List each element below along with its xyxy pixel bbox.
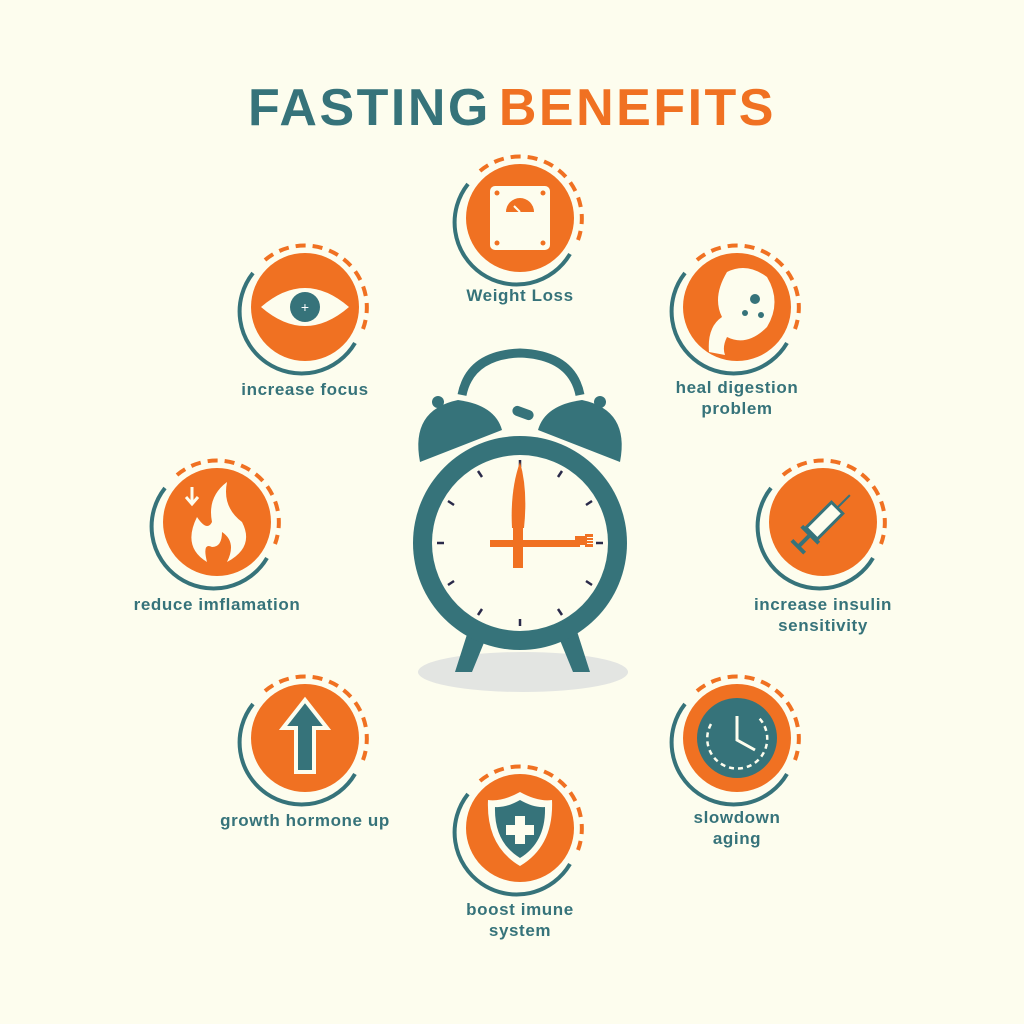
label: reduce inflammation: reduce imflamation (134, 595, 300, 614)
icon: flame (152, 460, 279, 588)
icon: weight loss scale (455, 156, 582, 284)
title: FASTINGBENEFITS (248, 79, 776, 137)
label: increase focus: increase focus (241, 380, 369, 399)
label: heal digestion: problem (701, 399, 773, 418)
label: insulin (754, 595, 892, 635)
icon: eye (240, 245, 367, 373)
label: heal digestion: heal digestion (676, 378, 798, 397)
label: slowdown aging: aging (713, 829, 761, 848)
icon: arrow up (240, 676, 367, 804)
alarm clock (413, 353, 628, 692)
label: heal digestion (676, 378, 798, 418)
label: growth hormone: growth hormone up (220, 811, 390, 830)
label: immune: system (489, 921, 551, 940)
label: insulin: sensitivity (778, 616, 868, 635)
label: slowdown aging: slowdown (694, 808, 780, 827)
icon: stomach (672, 245, 799, 373)
label: slowdown aging (694, 808, 780, 848)
label: insulin: increase insulin (754, 595, 892, 614)
icon: syringe (758, 460, 885, 588)
icon: eye: + (301, 299, 309, 315)
label: immune: boost imune (466, 900, 574, 919)
icon: aging clock (672, 676, 799, 804)
icon: shield (455, 766, 582, 894)
label: weight loss: Weight Loss (466, 286, 574, 305)
label: immune (466, 900, 574, 940)
